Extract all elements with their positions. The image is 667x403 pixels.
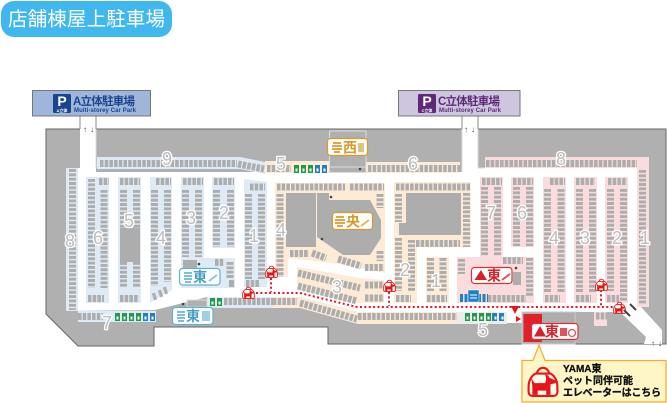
sign: east elevator bbox=[172, 308, 213, 324]
traffic arrows: ↓ bbox=[658, 339, 662, 348]
sign: YAMA east elevator bbox=[532, 324, 578, 340]
traffic arrows: ↑ bbox=[651, 339, 655, 348]
icon: pet marker 4 bbox=[596, 279, 607, 291]
zone numbers: 2 bbox=[612, 228, 622, 248]
zone numbers: 8 bbox=[556, 149, 566, 169]
parking map bbox=[46, 116, 666, 348]
zone numbers: 3 bbox=[332, 277, 342, 297]
sign: east escalator bbox=[180, 268, 220, 285]
sign: east escalator: 東 bbox=[193, 269, 207, 285]
traffic arrows: ↓ bbox=[471, 125, 475, 134]
sign: C multi-storey car park: C立体 bbox=[422, 107, 432, 113]
rooftop base bbox=[46, 129, 666, 346]
zone numbers: 9 bbox=[162, 149, 172, 169]
sign: A multi-storey car park: A立体 bbox=[57, 107, 67, 113]
zone numbers: 7 bbox=[102, 313, 112, 333]
sign: west bbox=[328, 138, 368, 156]
zone numbers: 5 bbox=[478, 320, 488, 340]
zone numbers: 7 bbox=[486, 203, 496, 223]
traffic arrows: ↑ bbox=[83, 125, 87, 134]
icon: pet marker 5 bbox=[614, 302, 625, 314]
callout: pet elevator bbox=[522, 345, 666, 402]
zone numbers: 6 bbox=[408, 154, 418, 174]
title: 店舗棟屋上駐車場 bbox=[8, 8, 165, 30]
zone: west blue bbox=[66, 157, 273, 322]
traffic arrows bbox=[83, 125, 662, 348]
sign: centre: 央 bbox=[346, 214, 360, 230]
sign: A multi-storey car park bbox=[32, 90, 150, 116]
red triangle markers bbox=[511, 306, 521, 322]
pet route bbox=[256, 278, 618, 307]
sign: C multi-storey car park bbox=[398, 90, 520, 116]
icon: pet marker 1 bbox=[243, 287, 254, 299]
sign: A multi-storey car park: P bbox=[57, 93, 67, 109]
building: YAMA east bbox=[522, 312, 575, 344]
sign: YAMA east escalator bbox=[472, 268, 512, 284]
sign: A multi-storey car park: A立体駐車場 bbox=[73, 94, 136, 108]
zone numbers: 6 bbox=[93, 228, 103, 248]
sign: YAMA east escalator: 東 bbox=[487, 268, 501, 284]
icon: blue accessible toilet sign bbox=[460, 290, 488, 302]
callout text: ペット同伴可能 bbox=[563, 374, 633, 387]
traffic arrows: ↓ bbox=[90, 125, 94, 134]
small gray markers bbox=[182, 168, 517, 305]
sign: C multi-storey car park: P bbox=[422, 93, 432, 109]
callout text: エレベーターはこちら bbox=[563, 387, 661, 399]
icon: pet bag bbox=[529, 368, 557, 396]
zone numbers: 3 bbox=[580, 228, 590, 248]
zone: central tan bbox=[265, 131, 471, 324]
zone numbers bbox=[65, 149, 650, 340]
zone: east pink bbox=[457, 157, 649, 326]
icon: pet marker 2 bbox=[266, 266, 277, 278]
zone numbers: 5 bbox=[124, 211, 134, 231]
sign: YAMA east elevator: 東 bbox=[545, 324, 559, 340]
sign: C multi-storey car park: C立体駐車場 bbox=[438, 94, 500, 108]
zone numbers: 1 bbox=[431, 271, 441, 291]
zone numbers: 3 bbox=[186, 208, 196, 228]
callout text: YAMA東 bbox=[563, 362, 602, 375]
sign: A multi-storey car park: Multi-storey Car Park bbox=[74, 108, 137, 114]
zone numbers: 1 bbox=[249, 226, 259, 246]
zone numbers: 4 bbox=[276, 220, 286, 240]
zone numbers: 1 bbox=[640, 228, 650, 248]
sign: west: 西 bbox=[343, 140, 357, 156]
driving lanes bbox=[66, 116, 662, 344]
icon: pet marker 3 bbox=[384, 280, 395, 292]
zone numbers: 2 bbox=[400, 260, 410, 280]
zone numbers: 8 bbox=[65, 231, 75, 251]
sign: C multi-storey car park: Multi-storey Car Park bbox=[439, 108, 502, 114]
callout text bbox=[563, 362, 661, 399]
accessible spaces bbox=[115, 169, 506, 318]
zone numbers: 5 bbox=[276, 154, 286, 174]
gray voids bbox=[286, 193, 461, 255]
zone numbers: 4 bbox=[549, 228, 559, 248]
title bbox=[1, 1, 172, 37]
zone numbers: 6 bbox=[517, 203, 527, 223]
sign: centre bbox=[332, 212, 372, 230]
sign: east elevator: 東 bbox=[186, 308, 200, 324]
traffic arrows: ↑ bbox=[464, 125, 468, 134]
zone numbers: 4 bbox=[156, 228, 166, 248]
zone numbers: 2 bbox=[219, 203, 229, 223]
